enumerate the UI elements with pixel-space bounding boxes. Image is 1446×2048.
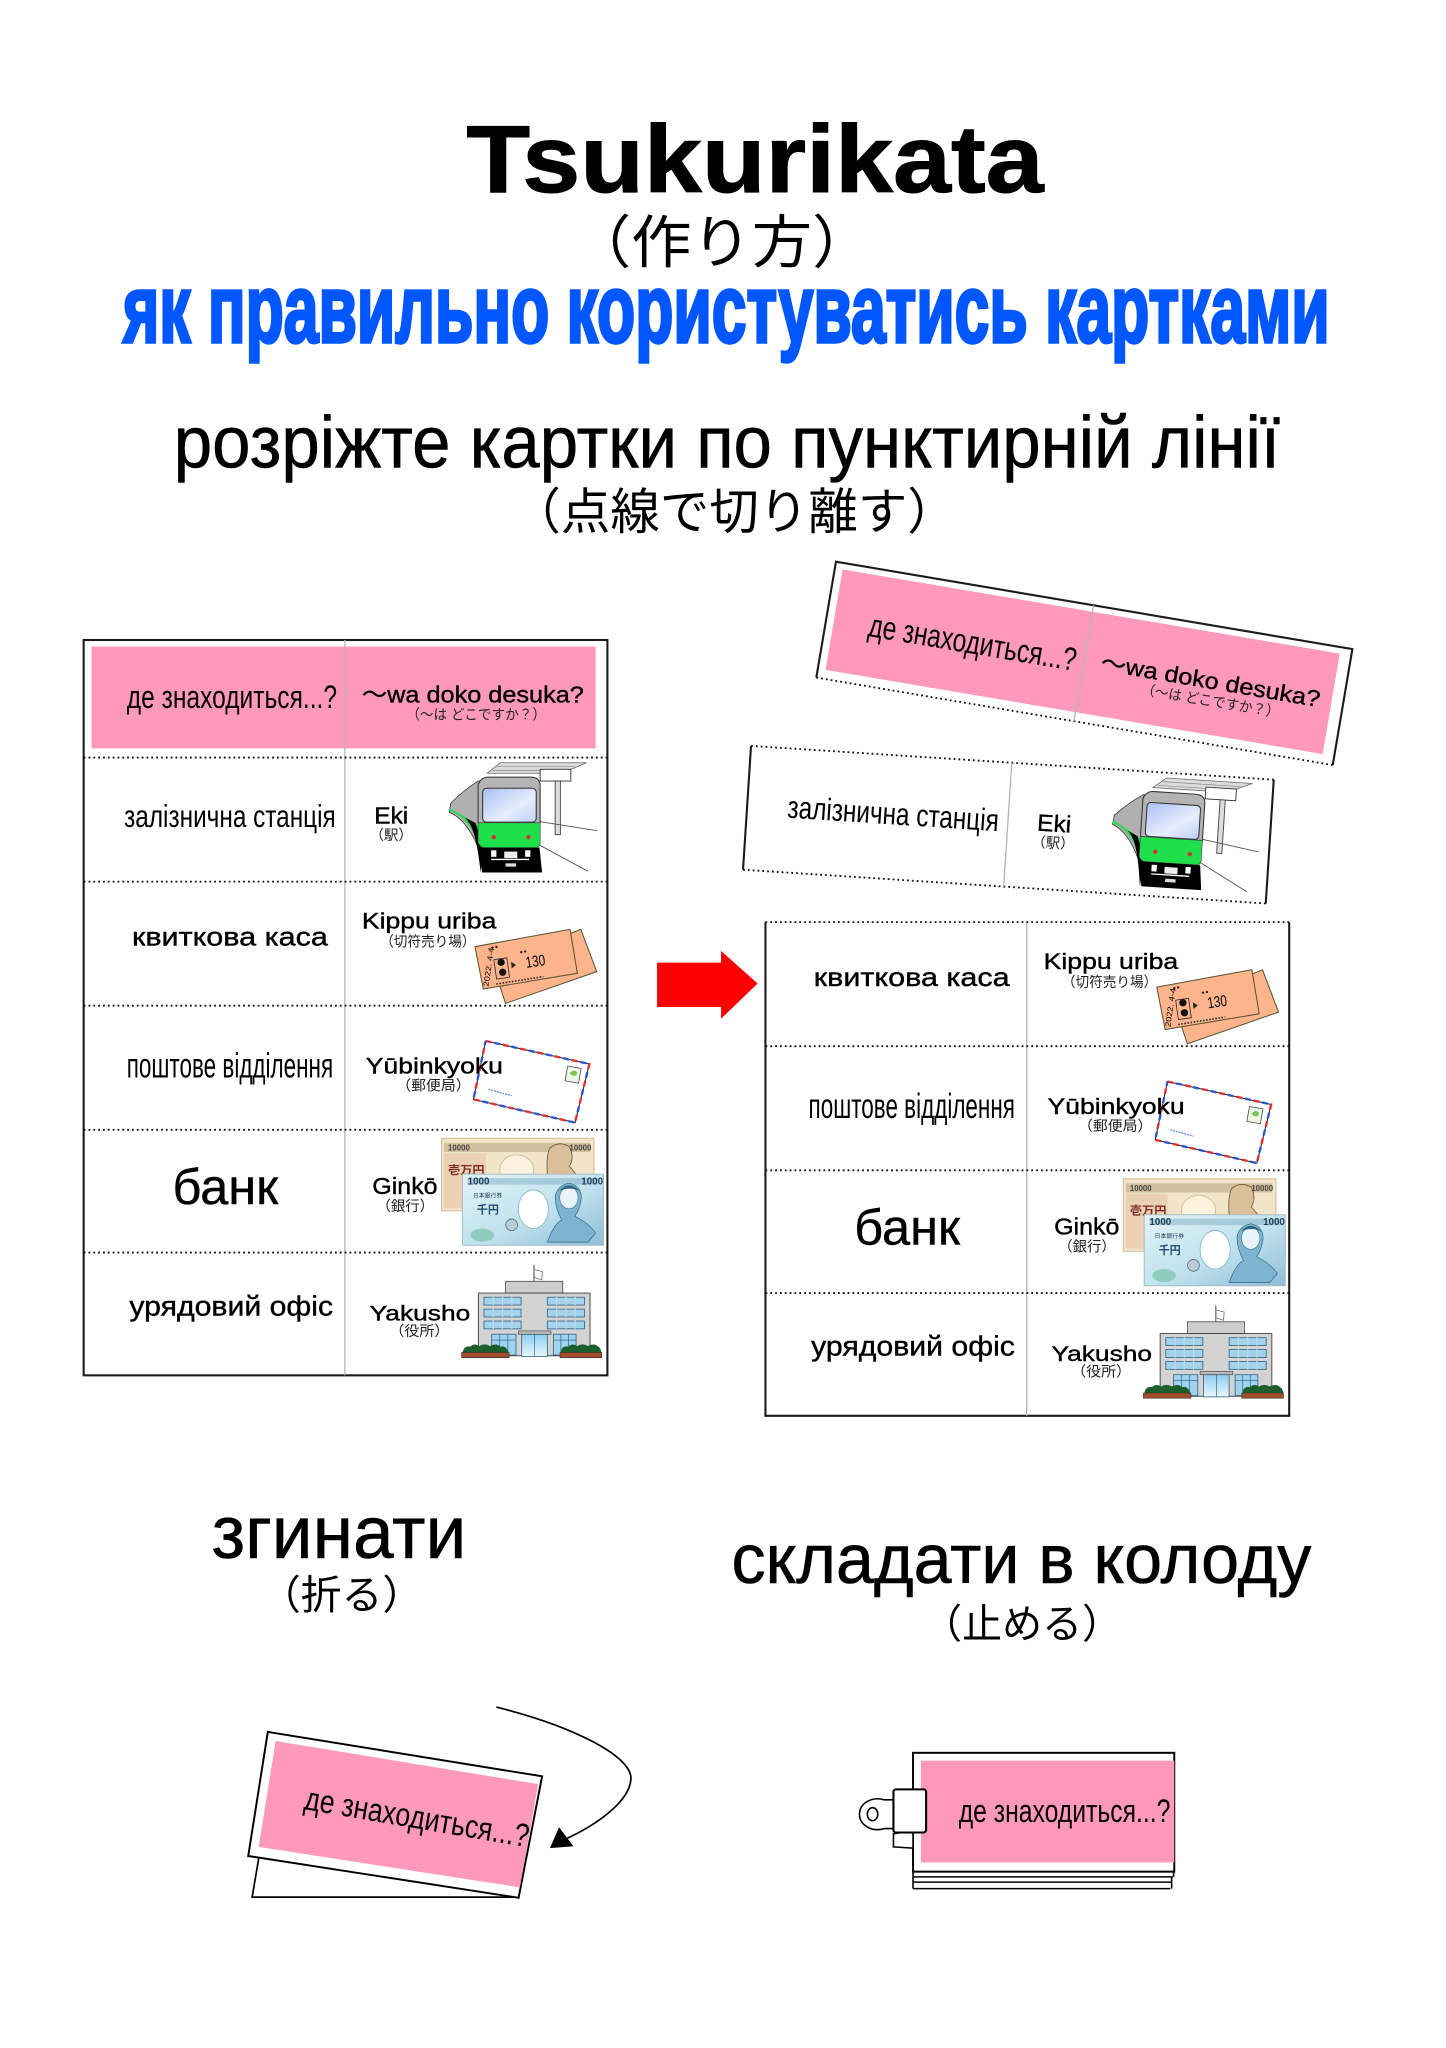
icon: air mail envelope xyxy=(1155,1081,1271,1163)
card text: ～wa doko desuka? xyxy=(1099,649,1322,712)
row text: government office: （役所） xyxy=(1071,1364,1131,1381)
icon: binder clip xyxy=(859,1789,926,1848)
row 3 text: Kippu uriba xyxy=(362,909,497,934)
row 4 text: поштове відділення xyxy=(127,1047,333,1086)
icon: air mail envelope xyxy=(473,1041,589,1123)
row text: ticket office: （切符売り場） xyxy=(1062,974,1157,991)
row 5 text: （銀行） xyxy=(376,1198,434,1215)
card text: Eki xyxy=(1036,810,1072,838)
icon: train at station xyxy=(449,763,597,872)
pink top card xyxy=(921,1761,1174,1863)
pink header band xyxy=(91,647,596,748)
card text xyxy=(864,606,1323,728)
card text: де знаходиться...? xyxy=(866,606,1079,678)
row 1 text: （～は どこですか？） xyxy=(406,707,546,724)
stacked card edges xyxy=(913,1872,1174,1889)
row 5 text xyxy=(172,1159,438,1215)
row text: bank: （銀行） xyxy=(1058,1238,1116,1255)
row text: ticket office: Kippu uriba xyxy=(1044,949,1179,974)
title: Tsukurikata xyxy=(466,107,1045,213)
diagram: clipped deck of cards xyxy=(859,1753,1174,1889)
card text: （～は どこですか？） xyxy=(1140,681,1281,721)
diagram: folded card xyxy=(248,1732,542,1898)
icon: yen banknotes xyxy=(442,1138,604,1245)
heading in Japanese: cut along dotted line: （点線で切り離す） xyxy=(511,484,957,540)
heading: fold: згинати xyxy=(212,1491,466,1574)
row 5 text: банк xyxy=(172,1159,279,1215)
icon: government office building xyxy=(462,1265,602,1358)
pink card face xyxy=(259,1741,538,1887)
deck text: де знаходиться...? xyxy=(959,1792,1170,1829)
panel: cut header card, rotated xyxy=(816,562,1352,765)
row text: bank: Ginkō xyxy=(1054,1213,1119,1239)
panel: full card sheet xyxy=(84,640,607,1375)
row text: post office xyxy=(809,1087,1185,1135)
row 3 text: квиткова каса xyxy=(132,922,328,952)
row 2 text: （駅） xyxy=(370,827,413,844)
row text: government office: Yakusho xyxy=(1051,1341,1152,1366)
row text: post office: поштове відділення xyxy=(809,1087,1015,1126)
icon: government office building xyxy=(1143,1305,1283,1398)
row text: ticket office xyxy=(814,949,1179,992)
row 1 text xyxy=(127,678,584,724)
row text: government office: урядовий офіс xyxy=(811,1331,1015,1362)
icon: train tickets xyxy=(1157,970,1278,1044)
row 6 text: Yakusho xyxy=(370,1300,470,1325)
arrow: fold direction xyxy=(496,1707,631,1848)
row 6 text: （役所） xyxy=(389,1323,449,1340)
icon: train tickets xyxy=(475,929,597,1003)
row 4 text xyxy=(127,1047,503,1095)
row 3 text xyxy=(132,909,497,952)
pink band xyxy=(826,569,1340,754)
heading: stack into a deck: складати в колоду xyxy=(731,1520,1312,1598)
card text: （駅） xyxy=(1031,833,1075,853)
row 2 text: Eki xyxy=(374,803,408,829)
row text: ticket office: квиткова каса xyxy=(814,962,1010,992)
row 4 text: （郵便局） xyxy=(396,1078,471,1095)
icon: yen banknotes xyxy=(1123,1179,1285,1286)
arrow: red right arrow xyxy=(657,951,758,1019)
row text: post office: （郵便局） xyxy=(1078,1118,1152,1135)
row 6 text xyxy=(129,1290,470,1340)
folded card text: де знаходиться...? xyxy=(302,1779,532,1854)
row 5 text: Ginkō xyxy=(372,1173,438,1199)
title in Japanese: （作り方） xyxy=(571,212,873,276)
heading in Japanese: fold: （折る） xyxy=(260,1572,423,1618)
row 4 text: Yūbinkyoku xyxy=(366,1054,503,1079)
row text: bank: банк xyxy=(854,1200,960,1256)
panel: cut station card, rotated xyxy=(743,746,1274,904)
row text: bank xyxy=(854,1200,1119,1256)
card text: залізнична станція xyxy=(787,790,1000,838)
row 1 text: де знаходиться...? xyxy=(127,678,337,715)
panel: remaining cards xyxy=(765,922,1289,1416)
row 1 text: ～wa doko desuka? xyxy=(362,682,584,708)
row text: post office: Yūbinkyoku xyxy=(1048,1094,1185,1119)
heading in Japanese: clip together: （止める） xyxy=(922,1601,1122,1647)
icon: train at station xyxy=(1109,775,1263,894)
row 3 text: （切符売り場） xyxy=(380,933,475,950)
row 2 text: залізнична станція xyxy=(124,799,336,834)
row text: government office xyxy=(811,1331,1152,1381)
heading: cut along dotted line: розріжте картки по пунктирній лінії xyxy=(174,403,1280,484)
row 6 text: урядовий офіс xyxy=(129,1290,333,1321)
